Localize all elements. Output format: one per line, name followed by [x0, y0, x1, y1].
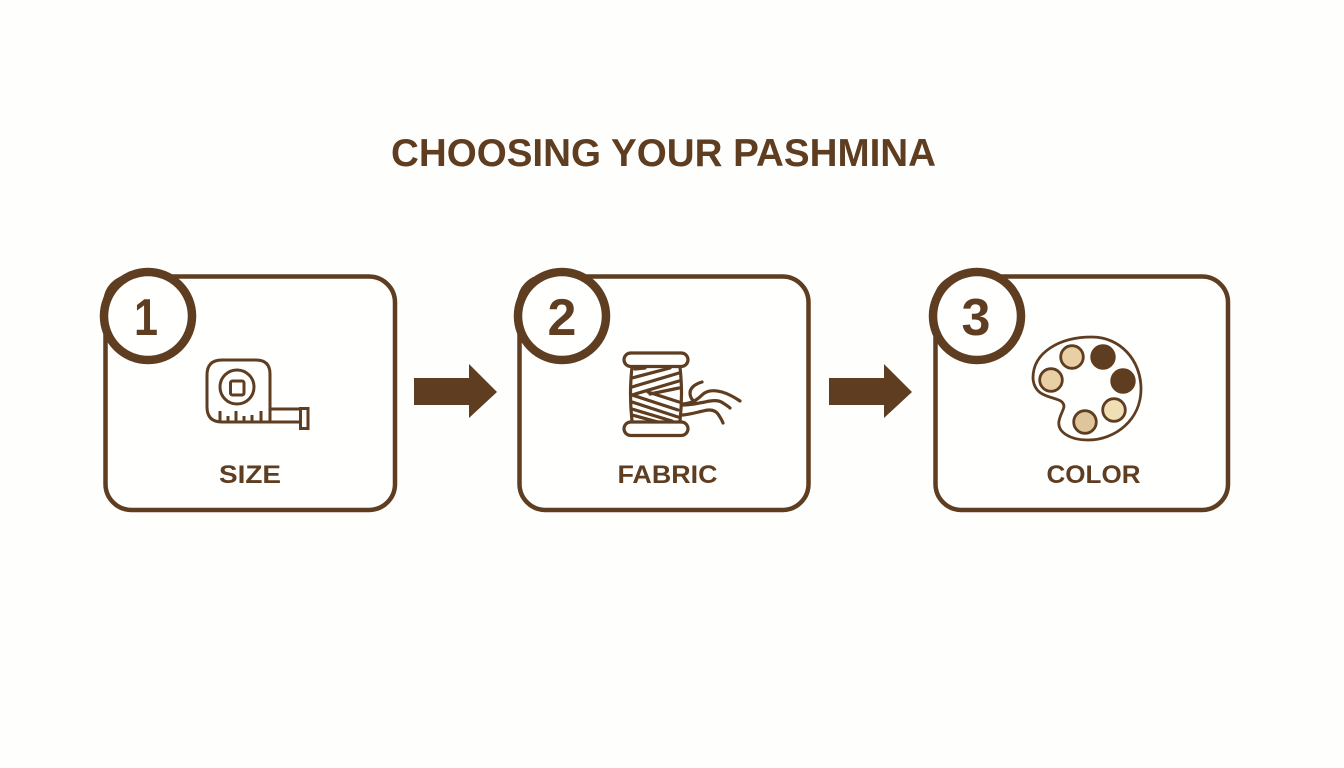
card outline — [936, 276, 1228, 510]
number badge 2 — [518, 272, 606, 360]
number badge 3 — [933, 272, 1021, 360]
arrow: step 1 to step 2 — [414, 364, 497, 418]
card outline — [520, 276, 808, 510]
title: CHOOSING YOUR PASHMINA — [391, 132, 936, 175]
label: size: SIZE — [219, 461, 281, 489]
panel: step 3 color — [933, 272, 1228, 510]
arrow: step 2 to step 3 — [829, 364, 912, 418]
label: fabric: FABRIC — [618, 461, 718, 489]
label: color: COLOR — [1046, 461, 1140, 489]
number badge 1: 1 — [134, 289, 158, 347]
card outline — [106, 276, 395, 510]
icon: paint palette — [1033, 337, 1141, 440]
icon: tape measure — [207, 360, 308, 428]
number badge 1 — [104, 272, 192, 360]
number badge 3: 3 — [962, 289, 990, 347]
panel: step 1 size — [104, 272, 395, 510]
panel: step 2 fabric — [518, 272, 808, 510]
number badge 2: 2 — [548, 289, 576, 347]
icon: thread spool — [624, 353, 740, 436]
